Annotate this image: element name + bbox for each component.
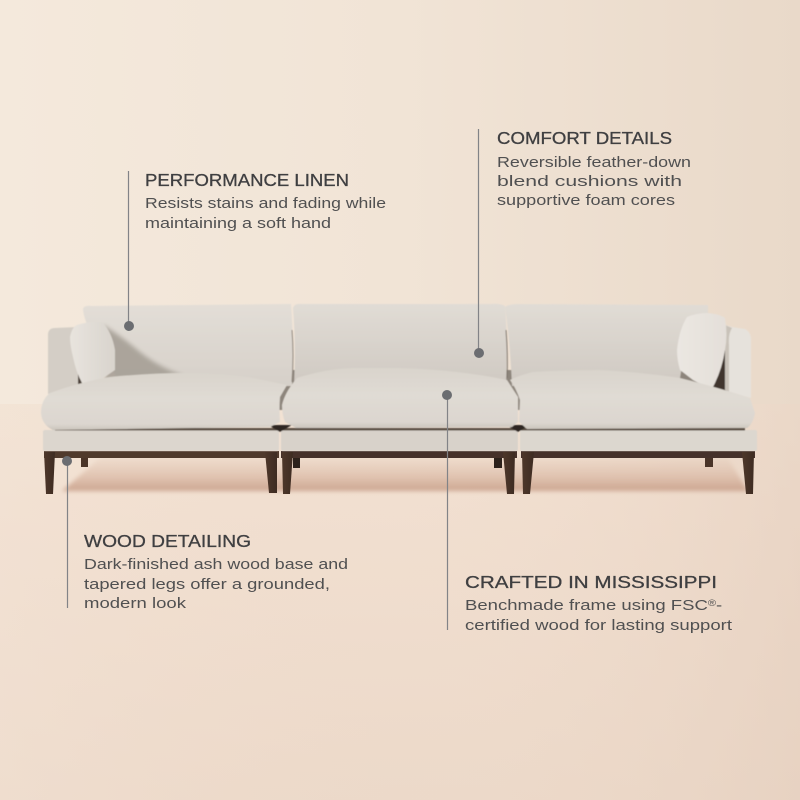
back fill behind seat gaps (120, 370, 700, 410)
shadow under seats (55, 428, 745, 430)
back cushions (83, 304, 293, 386)
cushion creases (292, 330, 293, 382)
callout: comfort details: blend cushions with (497, 173, 682, 190)
callout: wood detailing: Dark-finished ash wood base and (84, 556, 348, 573)
callout: comfort details: COMFORT DETAILS (497, 128, 672, 148)
callout: performance linen: maintaining a soft hand (145, 215, 331, 232)
callout: comfort details: supportive foam cores (497, 192, 675, 209)
dark gaps behind arms (68, 362, 88, 390)
callout: wood detailing (62, 456, 348, 612)
left arm (48, 327, 78, 394)
callout: crafted in mississippi: certified wood for lasting support (465, 617, 733, 634)
pillows (70, 322, 115, 385)
callout: wood detailing: WOOD DETAILING (84, 531, 251, 551)
seat cushions (41, 373, 287, 430)
callout: comfort details (474, 128, 691, 358)
callout: performance linen: PERFORMANCE LINEN (145, 170, 349, 190)
callout: comfort details: Reversible feather-down (497, 154, 691, 171)
right arm (725, 325, 751, 398)
sofa floor shadow (62, 458, 748, 491)
callout: wood detailing: modern look (84, 595, 187, 612)
upholstery (41, 304, 757, 451)
callout: crafted in mississippi: Benchmade frame using FSC (465, 597, 708, 614)
illustration: three-seat sofa (41, 304, 757, 494)
base rails (43, 430, 279, 451)
callout: performance linen (124, 170, 386, 331)
callout: crafted in mississippi: ® (708, 599, 717, 609)
callout: crafted in mississippi: CRAFTED IN MISSISSIPPI (465, 572, 717, 592)
wood base and legs (44, 451, 755, 494)
callout: crafted in mississippi (442, 390, 733, 634)
callout: crafted in mississippi: - (716, 597, 722, 614)
callout: wood detailing: tapered legs offer a grounded, (84, 576, 330, 593)
callout: performance linen: Resists stains and fading while (145, 195, 386, 212)
